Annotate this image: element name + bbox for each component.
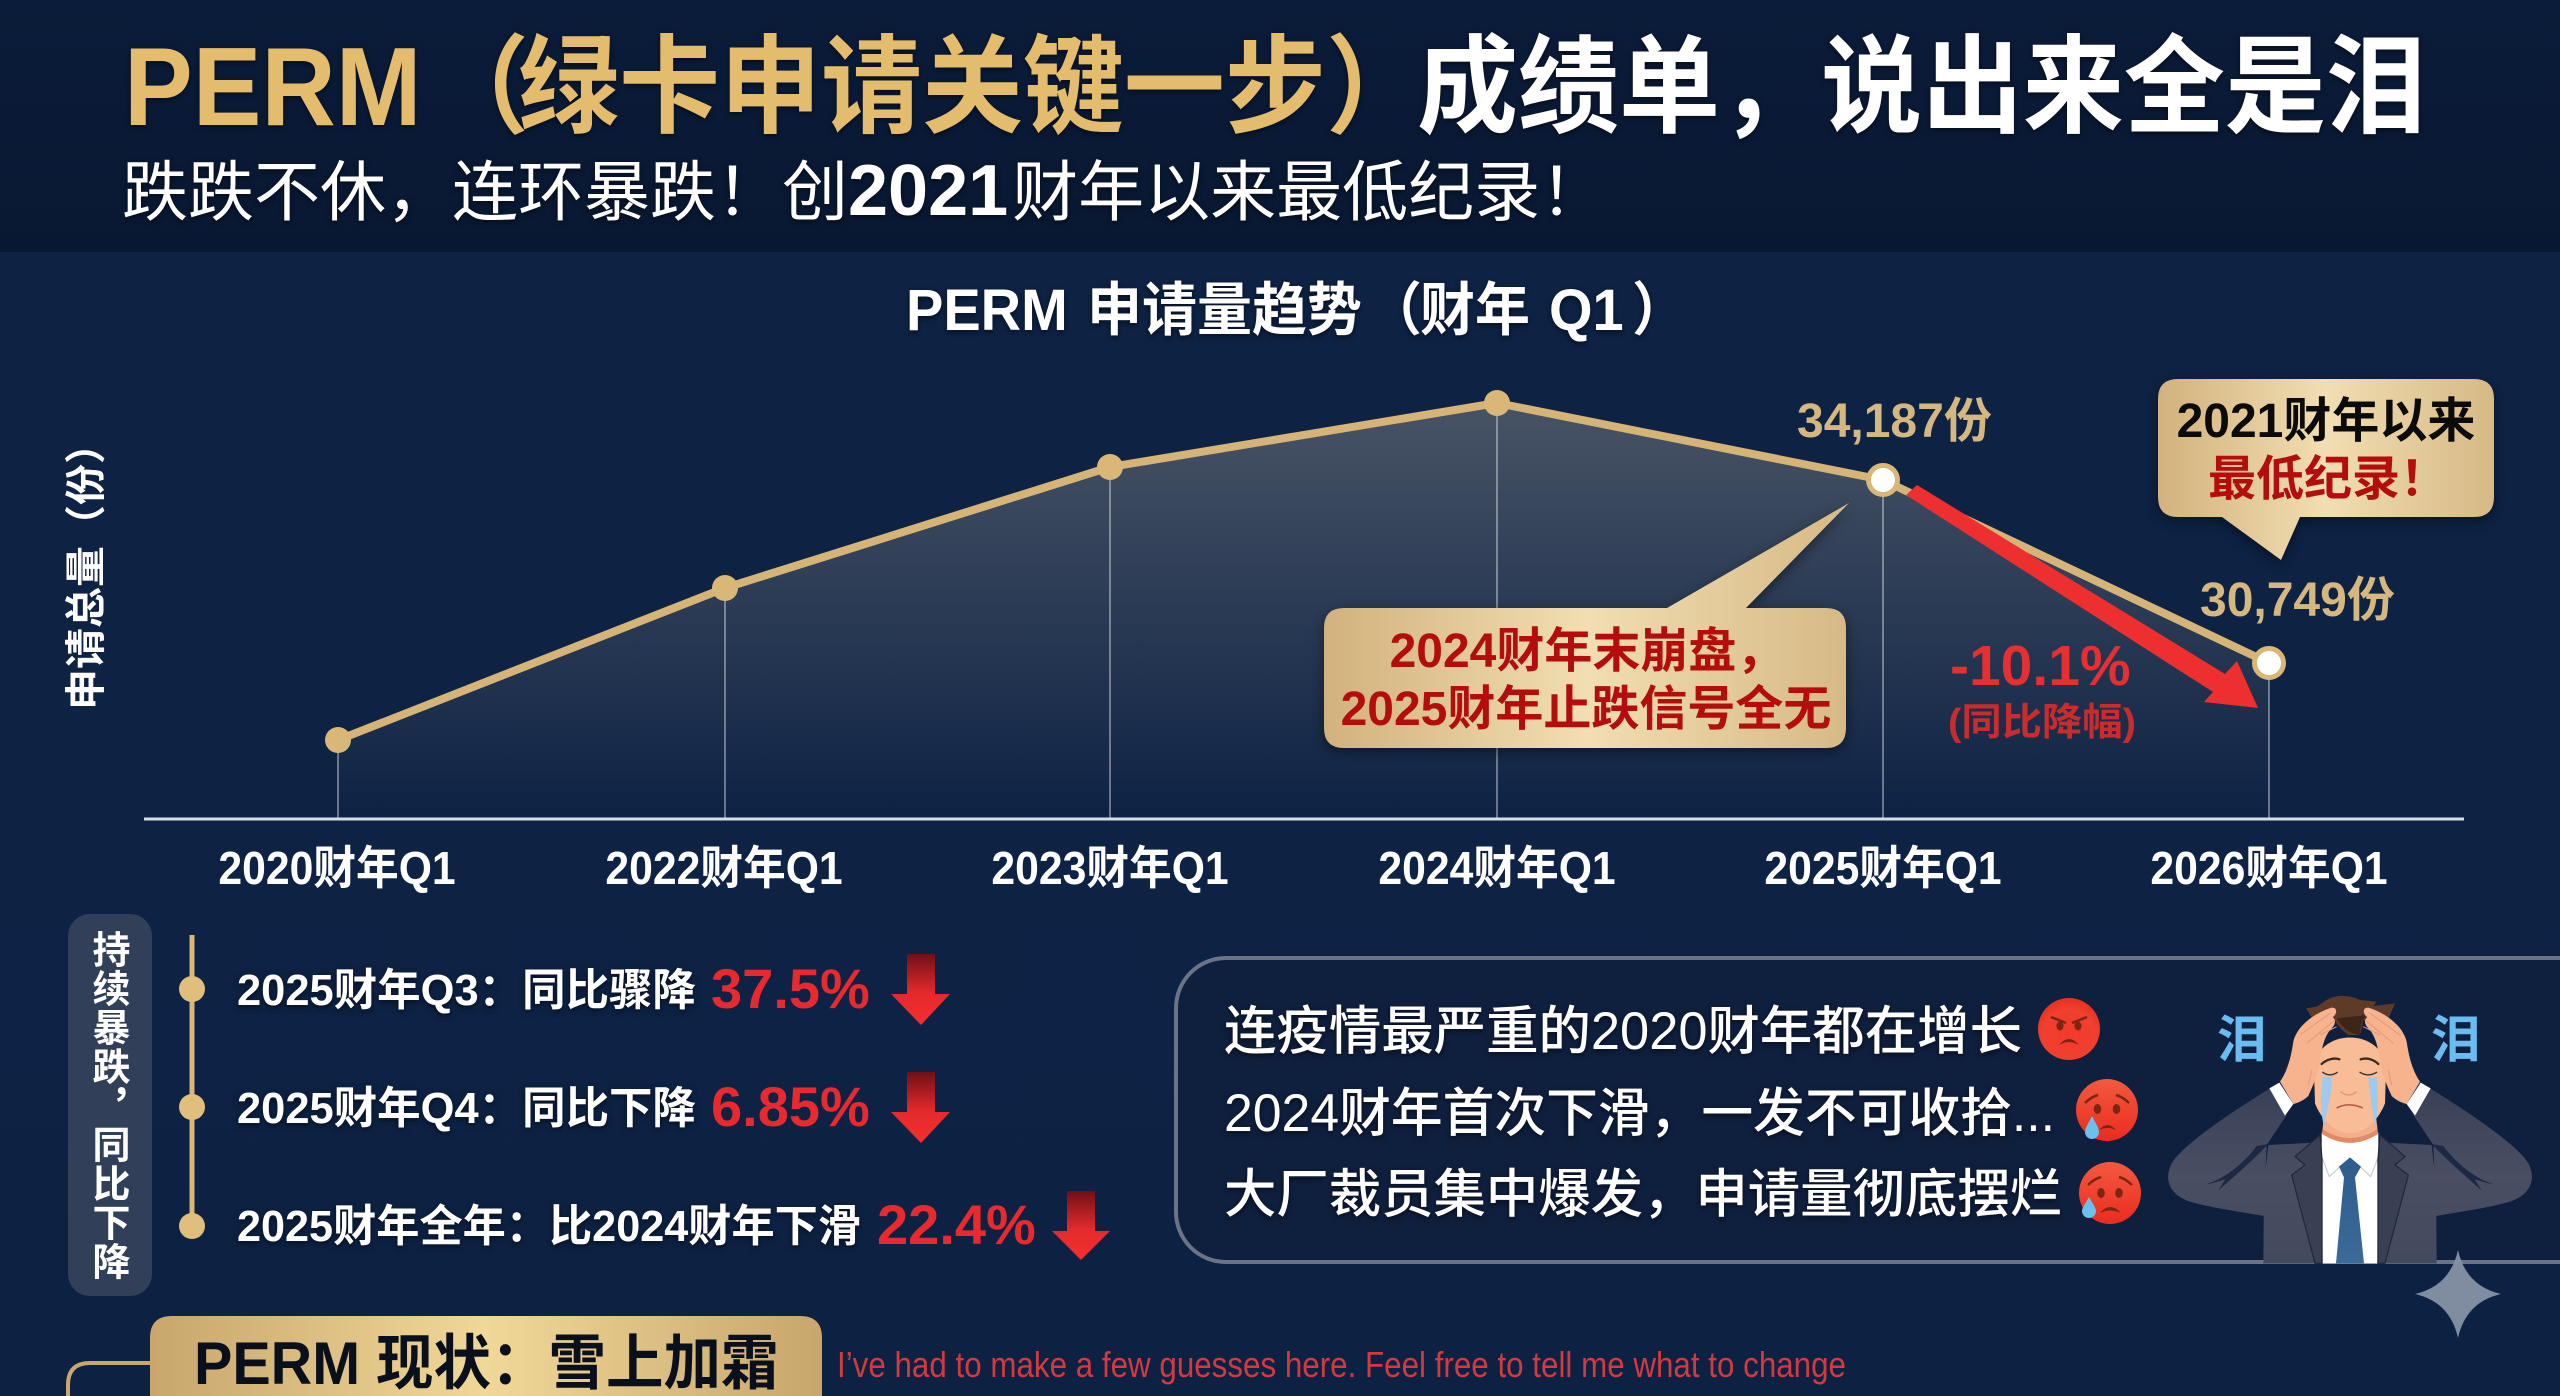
value label 34,187: 34,187份 <box>1797 395 1992 448</box>
x axis labels: 2024财年Q1 <box>1378 844 1616 894</box>
row Q3 <box>237 954 950 1025</box>
decline percent: -10.1% <box>1950 634 2131 698</box>
x axis labels: 2025财年Q1 <box>1764 844 2002 894</box>
y axis label: 申请总量（份） <box>63 423 109 710</box>
timeline <box>179 935 205 1239</box>
line chart <box>144 390 2464 819</box>
title: （ <box>428 28 529 148</box>
crying character: 泪 <box>2217 1012 2267 1068</box>
chart title: Q1 <box>1549 278 1624 343</box>
panel: comment box <box>1176 958 2560 1263</box>
row full year <box>237 1191 1110 1260</box>
title <box>124 24 2427 149</box>
row Q3: 37.5% <box>711 957 870 1020</box>
title: PERM <box>124 24 422 149</box>
area under line <box>338 403 2269 819</box>
callout: 2024 collapse: 2025财年止跌信号全无 <box>1341 683 1831 736</box>
chart title: 财年 <box>1420 278 1530 342</box>
sidebar label: 持续暴跌，同比下降 <box>86 930 130 1281</box>
data points <box>325 390 1510 753</box>
title: 成绩单，说出来全是泪 <box>1417 28 2427 148</box>
icon: crying businessman <box>2168 996 2532 1263</box>
title: 绿卡申请关键一步 <box>518 28 1326 148</box>
panel: PERM status <box>68 1316 822 1396</box>
header band <box>0 0 2560 252</box>
comment lines: 大厂裁员集中爆发，申请量彻底摆烂 <box>1224 1165 2062 1224</box>
row Q4 <box>237 1072 950 1143</box>
callout: 2024 collapse: 2024财年末崩盘， <box>1390 625 1784 678</box>
note text: I’ve had to make a few guesses here. Feel free to tell me what to change <box>837 1344 1846 1385</box>
subtitle: 跌跌不休，连环暴跌！创2021财年以来最低纪录！ <box>122 151 1606 231</box>
callout: 2024 collapse <box>1324 503 1849 748</box>
callout: record low <box>2158 379 2494 560</box>
row full year: 2025财年全年：比2024财年下滑 <box>237 1202 861 1251</box>
chart title: 申请量趋势 <box>1087 278 1362 342</box>
comment lines: 连疫情最严重的2020财年都在增长 <box>1224 1002 2022 1061</box>
callout: record low: 2021财年以来 <box>2177 395 2475 448</box>
row Q3: 2025财年Q3：同比骤降 <box>237 966 696 1015</box>
icon: crying emoji <box>2076 1079 2138 1141</box>
arrow: red decline <box>1906 485 2258 708</box>
callout: record low: 最低纪录！ <box>2208 453 2448 506</box>
x axis labels: 2023财年Q1 <box>991 844 1229 894</box>
chart title: （ <box>1367 278 1422 342</box>
icon: crying emoji <box>2079 1162 2141 1224</box>
decline caption: (同比降幅) <box>1948 702 2136 744</box>
x axis labels: 2022财年Q1 <box>605 844 843 894</box>
icon: sparkle <box>2415 1250 2501 1338</box>
sidebar label <box>68 914 152 1296</box>
x axis labels: 2020财年Q1 <box>218 844 456 894</box>
comment lines: 2024财年首次下滑，一发不可收拾... <box>1224 1084 2055 1143</box>
trend line <box>338 403 2269 740</box>
section heading: PERM 现状：雪上加霜 <box>194 1331 778 1396</box>
chart title: PERM <box>906 278 1068 343</box>
panel: continued decline <box>68 914 1110 1296</box>
crying character: 泪 <box>2431 1012 2481 1068</box>
row Q4: 2025财年Q4：同比下降 <box>237 1084 696 1133</box>
x axis labels <box>218 844 2388 894</box>
row full year: 22.4% <box>877 1193 1036 1256</box>
row Q4: 6.85% <box>711 1075 870 1138</box>
chart title: ） <box>1632 278 1687 342</box>
icon: angry emoji <box>2038 998 2100 1060</box>
comment lines <box>1224 1002 2062 1224</box>
title: ） <box>1326 28 1427 148</box>
x axis labels: 2026财年Q1 <box>2150 844 2388 894</box>
value label 30,749: 30,749份 <box>2200 574 2395 627</box>
